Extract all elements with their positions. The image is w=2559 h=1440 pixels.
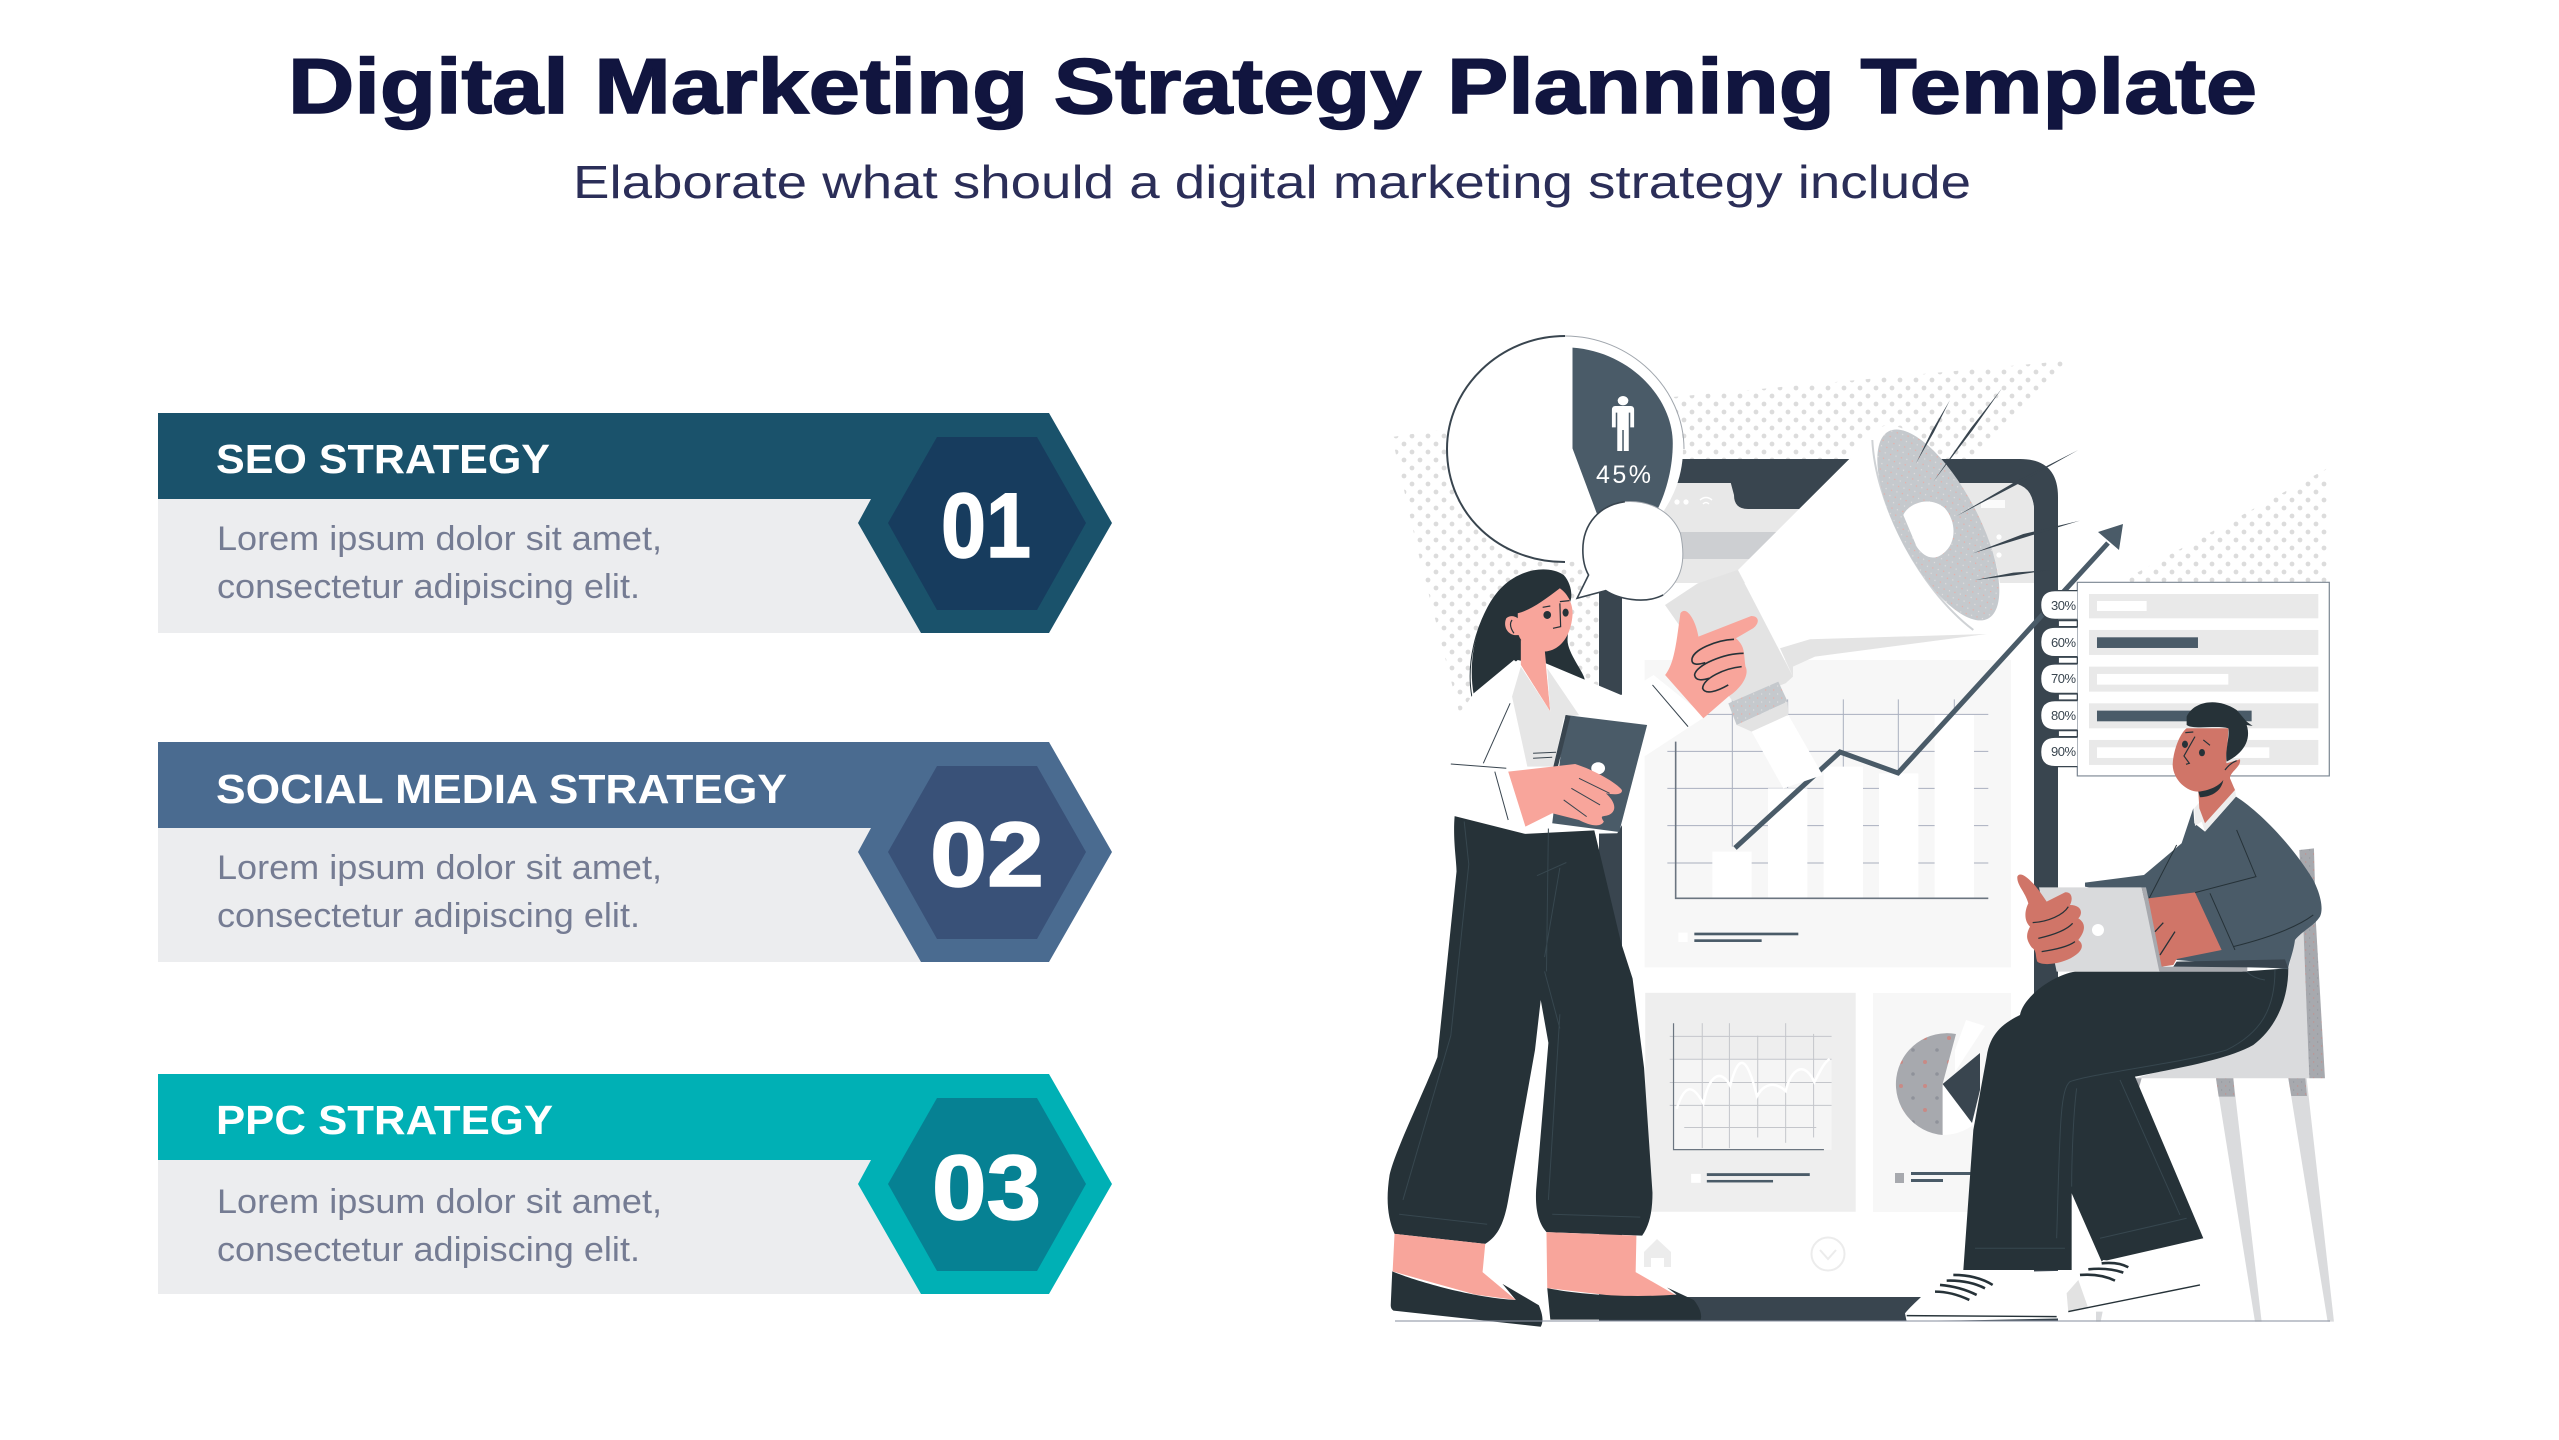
woman face <box>1505 588 1573 652</box>
man jaw shadow <box>2198 780 2223 797</box>
small speech bubble <box>1577 501 1683 600</box>
man neck and face <box>2173 728 2240 823</box>
tablet <box>1552 715 1647 832</box>
woman trousers <box>1388 816 1701 1327</box>
ground line <box>1395 1320 2330 1322</box>
title: Digital Marketing Strategy Planning Template <box>288 42 2257 130</box>
woman shoes <box>1391 1271 1542 1327</box>
percent labels: 80% <box>2051 708 2076 723</box>
panel: main bar chart on phone <box>1645 660 2011 967</box>
megaphone handle <box>1665 570 1793 703</box>
percent labels <box>2051 598 2076 759</box>
arrow: trend line <box>1735 524 2123 848</box>
percent labels: 30% <box>2051 598 2076 613</box>
heading PPC: PPC STRATEGY <box>216 1097 553 1143</box>
body text PPC: consectetur adipiscing elit. <box>217 1231 640 1269</box>
man shoes <box>1905 1260 2207 1322</box>
megaphone bell rim <box>1839 406 2028 652</box>
phone frame <box>1599 459 2058 1321</box>
background dot pattern right <box>2120 468 2328 582</box>
woman figure <box>1388 569 1758 1327</box>
man figure <box>1905 702 2322 1322</box>
legend <box>1691 1174 1701 1183</box>
megaphone grip <box>1728 682 1823 788</box>
sound lines <box>1916 388 2080 580</box>
subtitle: Elaborate what should a digital marketing strategy include <box>573 156 1971 208</box>
woman pointing hand <box>1665 611 1758 718</box>
body text SEO: Lorem ipsum dolor sit amet, <box>217 520 662 558</box>
panel: social media strategy <box>158 742 1112 962</box>
number 02: 02 <box>930 804 1044 906</box>
laptop <box>2039 887 2160 972</box>
megaphone shadow <box>1780 634 1987 677</box>
body text social media: Lorem ipsum dolor sit amet, <box>217 849 662 887</box>
speech bubble with 45% pie <box>1447 336 1684 562</box>
woman shirt <box>1420 660 1705 835</box>
percent labels: 70% <box>2051 671 2076 686</box>
megaphone <box>1665 388 2080 703</box>
legend <box>1678 933 1688 942</box>
body text SEO: consectetur adipiscing elit. <box>217 568 640 606</box>
body text PPC: Lorem ipsum dolor sit amet, <box>217 1183 662 1221</box>
man hands and laptop <box>2017 874 2288 972</box>
heading SEO: SEO STRATEGY <box>216 436 550 482</box>
megaphone bell <box>1853 413 2023 637</box>
hexagon badge 01 <box>888 437 1086 610</box>
panel: SEO strategy <box>158 413 1112 633</box>
percent labels: 60% <box>2051 635 2076 650</box>
pie chart <box>1896 1020 1985 1135</box>
hexagon badge 03 <box>888 1098 1086 1271</box>
number 01: 01 <box>941 475 1031 577</box>
panel: PPC strategy <box>158 1074 1112 1294</box>
45 percent label: 45% <box>1596 461 1651 489</box>
icon: person <box>1612 396 1634 451</box>
man collar <box>2194 788 2236 832</box>
illustration: marketing team with phone dashboard <box>1388 336 2334 1327</box>
woman hair, face and upper body <box>1420 569 1758 835</box>
man hair <box>2187 702 2253 762</box>
chair <box>2096 848 2334 1322</box>
icon: home <box>1644 1239 1671 1267</box>
background dot pattern left <box>1392 360 2075 760</box>
percent labels: 90% <box>2051 744 2076 759</box>
man right hand <box>2148 892 2222 967</box>
panel: line chart on phone <box>1645 993 1856 1212</box>
woman neck <box>1521 640 1550 712</box>
man thumb-up hand <box>2017 874 2084 964</box>
man sweater <box>2085 702 2322 969</box>
body text social media: consectetur adipiscing elit. <box>217 897 640 935</box>
panel: pie chart on phone <box>1873 993 2011 1212</box>
man trousers <box>1963 968 2288 1270</box>
stats panel with percent bars <box>2041 582 2329 776</box>
number 03: 03 <box>932 1137 1041 1239</box>
icon: chevron circle <box>1812 1238 1844 1270</box>
hexagon badge 02 <box>888 766 1086 939</box>
woman ankles <box>1393 1234 1516 1300</box>
megaphone cone <box>1738 433 1987 648</box>
heading social media: SOCIAL MEDIA STRATEGY <box>216 766 787 812</box>
woman lower hand <box>1508 764 1622 827</box>
